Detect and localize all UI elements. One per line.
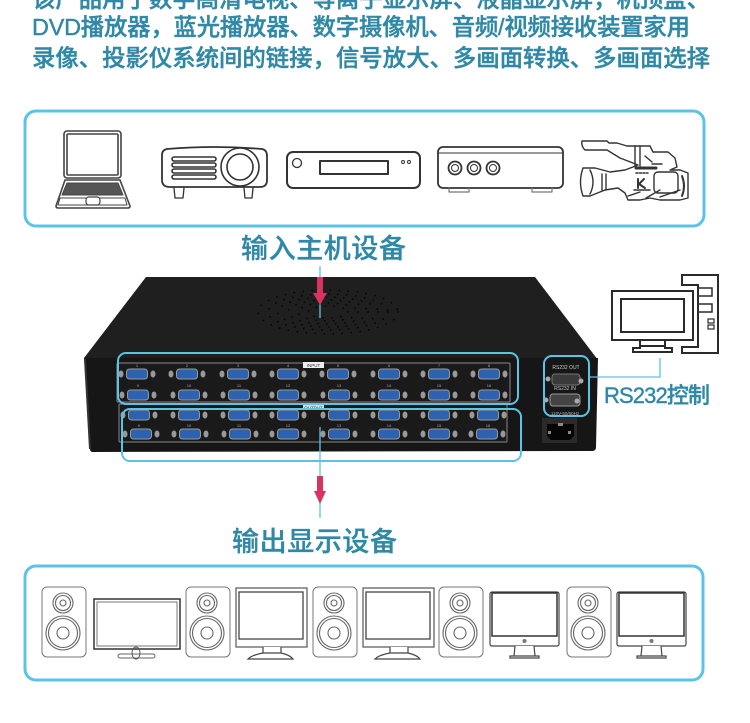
output port plate: 11 [237,423,242,428]
RS232 ports: RS232 IN [554,386,576,392]
label: RS232 control: RS232控制 [604,383,710,408]
icon: monitor 1 [236,588,307,659]
output port plate: 14 [387,423,392,428]
input port plate: 16 [487,383,492,388]
output port plate: 12 [286,423,291,428]
arrow: input down [313,277,327,305]
input port plate: 7 [438,363,441,368]
icon: speaker 2 [186,587,230,657]
input port plate: 8 [488,363,491,368]
speaker grille [258,290,398,334]
icon: projector [162,147,267,198]
heading: input: 输入主机设备 [241,234,406,264]
intro text: 录像、投影仪系统间的链接，信号放大、多画面转换、多画面选择 [32,45,710,71]
input port plate: 14 [387,383,392,388]
output port plate: 13 [337,423,342,428]
intro text: DVD播放器，蓝光播放器、数字摄像机、音频/视频接收装置家用 [32,14,690,40]
intro text [32,0,710,71]
output port plate: 15 [437,423,442,428]
chassis top [84,277,598,360]
heading: output: 输出显示设备 [232,527,397,557]
icon: monitor 2 [363,588,434,659]
RS232 ports: RS232 OUT [552,365,580,371]
device: matrix switcher rear [84,277,598,452]
output port plate: OUTPUT [304,406,323,410]
input port plate: 2 [186,363,189,368]
input port plate: 6 [388,363,391,368]
input port plate: 10 [187,383,192,388]
RS232 ports: 110V-50/60Hz [551,411,580,416]
input port plate: 9 [137,383,140,388]
icon: speaker 1 [42,587,86,657]
power socket [542,418,577,443]
icon: speaker 3 [313,587,357,657]
input port plate: 4 [287,363,290,368]
panel: input devices [25,111,704,226]
RS232 ports [544,365,584,416]
output port plate: 16 [486,423,491,428]
input port plate [117,362,510,402]
output port plate: 10 [187,423,192,428]
icon: video camera [580,141,688,200]
input port plate: 15 [437,383,442,388]
icon: speaker 4 [439,587,483,657]
input port plate: INPUT [307,363,321,368]
input port plate: 5 [337,363,340,368]
icon: control computer [612,275,718,353]
input port plate: 3 [237,363,240,368]
panel: output devices [25,566,703,680]
icon: laptop [56,131,130,208]
arrow: output down [314,476,326,504]
input port plate: 1 [136,363,139,368]
icon: iMac 1 [490,592,559,658]
icon: AV box [438,147,563,192]
output port plate: 9 [138,423,141,428]
input port plate: 11 [237,383,242,388]
icon: speaker 5 [567,587,611,657]
icon: DVD player [287,152,420,188]
input port plate: 13 [337,383,342,388]
output port plate [119,404,507,442]
input port plate: 12 [286,383,291,388]
icon: iMac 2 [617,592,686,658]
callout outlines and connectors [118,266,660,518]
chassis front [84,358,598,452]
icon: TV [94,599,180,659]
